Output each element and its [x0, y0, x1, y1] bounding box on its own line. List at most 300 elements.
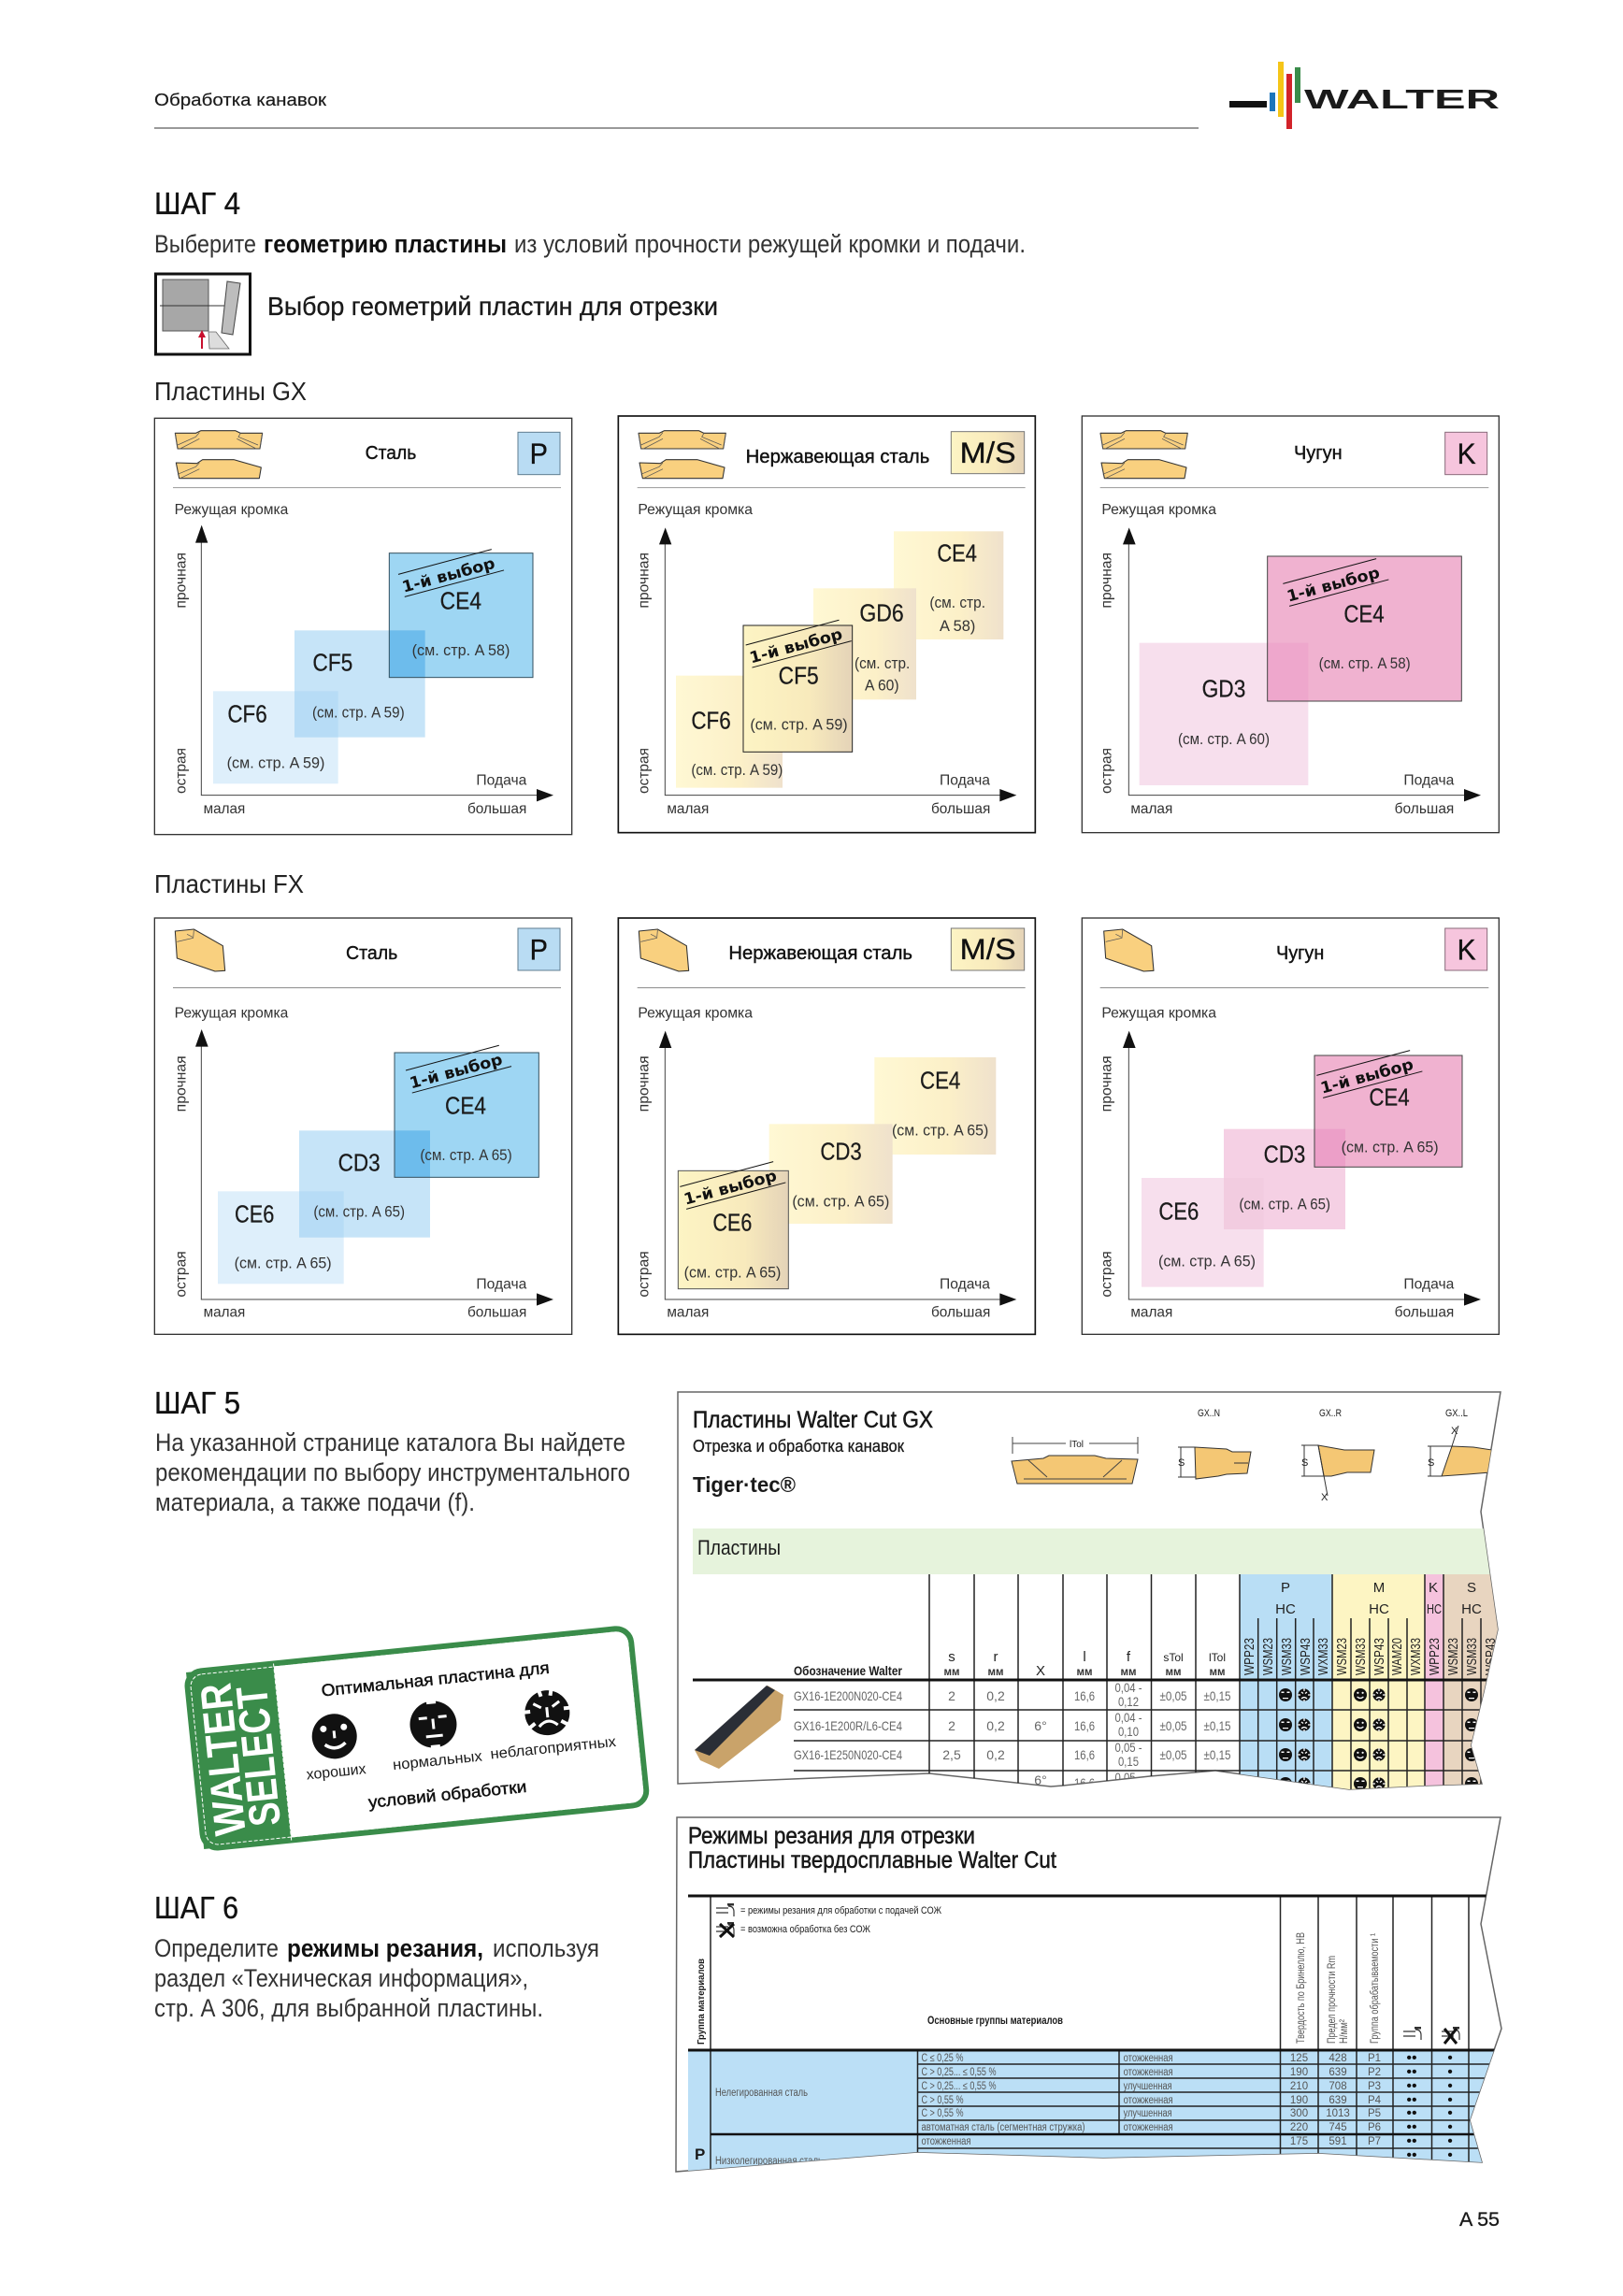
chart axes: Подача [1403, 1276, 1454, 1292]
badge: K [1445, 928, 1487, 970]
legend: coolant: = возможна обработка без СОЖ [740, 1924, 870, 1935]
table rows: material data: 745 [1329, 2122, 1347, 2133]
chart axes: острая [1099, 748, 1114, 794]
table header labels: Основные группы материалов [927, 2016, 1063, 2027]
legend: coolant: = режимы резания для обработки с подачей СОЖ [740, 1905, 941, 1916]
chart axes: прочная [636, 1055, 652, 1112]
box: CE4 [874, 1057, 996, 1155]
box: CE4 first choice [395, 1053, 539, 1177]
box: GD6: A 60) [865, 676, 899, 694]
chart axes: большая [931, 1305, 990, 1321]
box: CD3: (см. стр. A 65) [313, 1203, 405, 1221]
catalogue title [688, 1823, 1056, 1873]
chart axes: острая [1099, 1251, 1114, 1298]
text: step 6 instruction: Определите [154, 1934, 279, 1962]
table rows: material data: • [1447, 2064, 1453, 2080]
table header: columns: WPP23 [1242, 1638, 1257, 1675]
page number: A 55 [1459, 2209, 1500, 2231]
badge: Walter Select: нормальных [392, 1748, 483, 1773]
badge: M/S: M/S [960, 933, 1016, 966]
text: step 6 instruction: режимы резания, [287, 1934, 483, 1962]
box: GD6 [813, 588, 916, 699]
table rows: material data: • [1447, 2119, 1453, 2135]
chart axes: острая [173, 1251, 189, 1298]
table rows: material data: P6 [1368, 2122, 1381, 2133]
box: GD3: (см. стр. A 60) [1178, 730, 1270, 748]
box: CE6 [218, 1191, 344, 1284]
table rows: material data: 1013 [1326, 2108, 1350, 2119]
text: step 5 instruction: рекомендации по выбору инструментального [155, 1458, 630, 1486]
table header: columns: WSP43 [1483, 1638, 1499, 1675]
table rows: material data: •• [1406, 2092, 1417, 2108]
table rows: material data: 708 [1329, 2081, 1347, 2092]
box: CE4 first choice [389, 553, 533, 678]
table rows: material data: отожженная [922, 2136, 970, 2147]
table rows: material data: C > 0,55 % [922, 2095, 963, 2106]
table header: columns: WXM33 [1315, 1638, 1331, 1675]
table rows: material data: • [1447, 2105, 1453, 2121]
drawing: GX..N: GX..N [1198, 1408, 1220, 1419]
table header: columns: WSM33 [1279, 1638, 1295, 1675]
catalogue title: Пластины Walter Cut GX [693, 1407, 933, 1433]
text: step 6 instruction [154, 1934, 599, 2022]
table header: columns: WSM23 [1334, 1638, 1350, 1675]
box: CF5 first choice: (см. стр. A 59) [750, 716, 848, 734]
table rows: insert data: ±0,05 [1159, 1747, 1187, 1762]
chart axes: большая [931, 801, 990, 817]
chart axes: малая [1130, 801, 1172, 817]
table rows: material data: 428 [1329, 2053, 1347, 2064]
table header: columns: WPP23 [1427, 1638, 1443, 1675]
badge: Walter Select: SELECT [226, 1684, 290, 1829]
table rows: material data: автоматная сталь (сегментная стружка) [922, 2122, 1085, 2133]
box: CD3: CD3 [338, 1148, 381, 1176]
table rows: material data: 210 [1290, 2081, 1308, 2092]
logo: Walter [1229, 62, 1500, 129]
box: GD6: (см. стр. [855, 654, 910, 672]
box: CE4 first choice: CE4 [1343, 600, 1385, 628]
box: CD3 [769, 1124, 893, 1224]
box: CE4: CE4 [920, 1067, 960, 1095]
table rows: material data: Низколегированная сталь [715, 2156, 823, 2167]
chart axes [636, 1031, 1016, 1321]
box: CE6: CE6 [235, 1199, 274, 1227]
table rows: insert data: 2,5 [942, 1747, 961, 1762]
box: CF5: (см. стр. A 59) [312, 703, 405, 721]
band: inserts [693, 1528, 1492, 1574]
table header: columns: WSM23 [1260, 1638, 1276, 1675]
material title: Сталь [366, 443, 416, 464]
table rows: material data: • [1447, 2092, 1453, 2108]
table header: columns [794, 1580, 1499, 1679]
table rows: material data: • [1447, 2147, 1453, 2163]
chart axes: малая [1130, 1305, 1172, 1321]
table rows: material data: •• [1406, 2133, 1417, 2149]
drawing: GX..R: X [1321, 1492, 1329, 1503]
box: CD3 [1224, 1129, 1345, 1229]
heading: step 4: ШАГ 4 [154, 186, 240, 221]
box: CE4: CE4 [937, 539, 977, 567]
table rows: insert data: ±0,15 [1204, 1747, 1231, 1762]
icon: GX inserts [1100, 431, 1187, 479]
chart axes: большая [1395, 801, 1454, 817]
catalogue title: Режимы резания для отрезки [688, 1823, 975, 1849]
chart axes: прочная [1099, 1055, 1114, 1112]
icon: unfavourable conditions face [521, 1686, 574, 1738]
table rows: insert data: 0,12 [1118, 1694, 1139, 1709]
table rows: material data: 220 [1290, 2122, 1308, 2133]
drawing: GX..N: S [1178, 1457, 1185, 1469]
table rows: insert data: GX16-1E200N020-CE4 [794, 1688, 902, 1703]
catalogue title: Пластины твердосплавные Walter Cut [688, 1847, 1056, 1873]
table rows: material data: •• [1406, 2078, 1417, 2094]
table header labels: Предел прочности Rm [1325, 1956, 1338, 2044]
box: CE6: (см. стр. A 65) [1158, 1253, 1256, 1270]
icon: good conditions face [309, 1712, 359, 1761]
table rows: insert data: 2 [948, 1688, 955, 1703]
drawing: GX..L [1428, 1408, 1492, 1476]
table rows: material data: • [1447, 2078, 1453, 2094]
box: CF6 [213, 691, 338, 783]
table rows: insert data: 0,15 [1118, 1754, 1139, 1769]
table header: columns: sTol [1163, 1651, 1184, 1664]
table rows: insert data: 6° [1034, 1772, 1047, 1787]
table rows: material data: отожженная [1124, 2095, 1173, 2106]
badge: P: P [530, 934, 548, 967]
axis label: cutting edge: Режущая кромка [1101, 1005, 1216, 1021]
badge: K: K [1458, 934, 1476, 967]
chart axes: малая [667, 801, 709, 817]
badge: P [518, 432, 560, 475]
table rows: insert data: 0,2 [986, 1718, 1005, 1733]
table rows: material data: P5 [1368, 2108, 1381, 2119]
badge: Walter Select: хороших [306, 1761, 366, 1784]
table header labels: Н/мм² [1337, 2019, 1350, 2044]
chart axes: Подача [476, 772, 526, 788]
table rows: material data: • [1447, 2133, 1453, 2149]
text: step 4 instruction: Выберите [154, 230, 256, 258]
chart axes [636, 527, 1016, 817]
panel: GX stainless steel [618, 416, 1035, 833]
chart axes [173, 525, 553, 817]
drawing: GX insert with length dimension: lTol [1070, 1440, 1084, 1450]
drawing: GX..L: X [1451, 1426, 1458, 1437]
table rows: material data: отожженная [1124, 2067, 1173, 2078]
callout: first choice: 1-й выбор [400, 554, 497, 596]
table rows: material data: 300 [1290, 2108, 1308, 2119]
table rows: material data: P2 [1368, 2067, 1381, 2078]
table rows: material data: C > 0,25... ≤ 0,55 % [922, 2081, 997, 2092]
chart axes [1099, 527, 1481, 817]
drawing: GX..R [1301, 1408, 1374, 1503]
box: CF5 first choice [743, 625, 853, 752]
box: CE4 [894, 531, 1003, 639]
box: CE6: CE6 [1158, 1197, 1199, 1225]
material title: Нержавеющая сталь [746, 447, 929, 467]
chart axes: острая [636, 1251, 652, 1298]
box: CD3 [299, 1130, 430, 1238]
axis label: cutting edge: Режущая кромка [175, 1005, 288, 1021]
text: step 4 instruction [154, 230, 1026, 258]
table rows: material data: P3 [1368, 2081, 1381, 2092]
table header: columns: s [948, 1649, 955, 1665]
panel: GX steel [154, 418, 572, 835]
heading: GX inserts: Пластины GX [154, 377, 307, 406]
badge: Walter Select: условий обработки [367, 1777, 527, 1812]
drawing: GX..L: S [1428, 1457, 1434, 1469]
table rows: insert data: 0,05 - [1114, 1740, 1142, 1755]
table header labels [696, 1932, 1459, 2045]
chart axes: малая [667, 1305, 709, 1321]
table rows: insert data: 0,2 [986, 1688, 1005, 1703]
icon: parting-off tool [155, 274, 251, 354]
icon: GX inserts [639, 431, 725, 479]
chart axes: острая [636, 748, 652, 794]
table rows: material data: • [1447, 2050, 1453, 2066]
table rows: insert data: 0,2 [986, 1747, 1005, 1762]
icon: FX insert [1104, 929, 1154, 971]
text: step 5 instruction: материала, а также подачи (f). [155, 1488, 475, 1516]
chart axes: большая [467, 801, 526, 817]
table rows: insert data: 0,05 - [1114, 1770, 1142, 1785]
drawing: GX..R: GX..R [1319, 1408, 1342, 1419]
box: CE4: (см. стр. [929, 594, 985, 611]
table rows: material data: •• [1406, 2064, 1417, 2080]
table header: columns: мм [987, 1667, 1004, 1678]
table header: columns: WSP43 [1298, 1638, 1314, 1675]
badge: P: P [530, 438, 548, 470]
text: step 5 instruction [155, 1428, 630, 1516]
box: CE4 first choice: CE4 [1369, 1083, 1410, 1111]
box: CE4 first choice [1268, 556, 1461, 701]
badge: M/S [951, 928, 1025, 970]
chart axes: малая [204, 801, 245, 817]
table header: columns: мм [943, 1667, 960, 1678]
table rows: insert data: GX16-1E200R/L6-CE4 [794, 1718, 902, 1733]
table rows: insert data: 16,6 [1074, 1718, 1095, 1733]
panel: catalogue excerpt Walter Cut GX [678, 1392, 1515, 1799]
table rows: material data: 175 [1290, 2136, 1308, 2147]
table header: columns: WAM20 [1389, 1638, 1405, 1675]
heading: FX inserts: Пластины FX [154, 869, 304, 898]
axis label: cutting edge: Режущая кромка [638, 1005, 753, 1021]
box: CE4 first choice: CE4 [445, 1092, 486, 1120]
chart axes: Подача [940, 772, 990, 788]
table header: columns: HC [1427, 1601, 1442, 1617]
logo: Walter: WALTER [1304, 85, 1500, 115]
header section label: Обработка канавок [154, 90, 327, 109]
badge: K: K [1458, 438, 1476, 470]
callout: first choice: 1-й выбор [682, 1167, 779, 1209]
box: CE4 first choice: (см. стр. A 58) [412, 641, 510, 659]
box: CE4 first choice: (см. стр. A 65) [1342, 1138, 1439, 1155]
badge: P [518, 928, 560, 970]
table rows: material data: 591 [1329, 2136, 1347, 2147]
panel: FX stainless steel [618, 918, 1035, 1334]
table rows: insert data: 2 [948, 1718, 955, 1733]
subheading: geometry selection for parting: Выбор геометрий пластин для отрезки [267, 292, 718, 321]
axis label: cutting edge: Режущая кромка [1101, 502, 1216, 518]
box: CF6: CF6 [691, 706, 731, 734]
icon: normal conditions face [408, 1698, 459, 1751]
box: CF6: CF6 [227, 699, 267, 727]
table header: columns: WSP43 [1372, 1638, 1387, 1675]
callout: first choice: 1-й выбор [408, 1051, 505, 1092]
box: CE6 [1142, 1178, 1264, 1287]
heading: step 6: ШАГ 6 [154, 1890, 238, 1925]
table header: columns: f [1127, 1649, 1131, 1665]
chart axes: Подача [1403, 772, 1454, 788]
brand: Tiger-tec: Tiger·tec® [693, 1472, 796, 1497]
box: CD3: (см. стр. A 65) [792, 1193, 889, 1211]
box: CE4 first choice: CE4 [440, 587, 481, 615]
table header: columns: l [1083, 1649, 1086, 1665]
heading: step 5: ШАГ 5 [154, 1385, 240, 1420]
box: GD6: GD6 [859, 598, 904, 626]
table header: columns: HC [1369, 1601, 1389, 1617]
table rows: material data: •• [1406, 2147, 1417, 2163]
box: GD3 [1140, 643, 1308, 785]
band: inserts: Пластины [697, 1536, 781, 1559]
panel: FX cast iron [1082, 918, 1499, 1334]
table rows: material data: отожженная [1124, 2122, 1173, 2133]
table rows: material data: P1 [1368, 2053, 1381, 2064]
table header: columns: мм [1076, 1667, 1093, 1678]
table rows: material data: отожженная [1124, 2053, 1173, 2064]
panel: catalogue excerpt cutting data [676, 1817, 1511, 2178]
badge: M/S [951, 432, 1025, 474]
table rows: insert data: 0,04 - [1114, 1680, 1142, 1695]
table header: columns: Обозначение Walter [794, 1663, 902, 1678]
box: CD3: CD3 [820, 1138, 862, 1166]
chart axes: прочная [636, 552, 652, 609]
box: CD3: CD3 [1264, 1140, 1305, 1168]
callout: first choice: 1-й выбор [1285, 564, 1382, 606]
badge: Walter Select [186, 1628, 648, 1849]
table header labels: Группа материалов [696, 1959, 707, 2045]
table header: columns: X [1036, 1663, 1045, 1679]
box: CF5: CF5 [312, 648, 352, 676]
table rows: insert data: ±0,15 [1204, 1718, 1231, 1733]
table header labels: Группа обрабатываемости ¹ [1368, 1933, 1381, 2044]
badge: M/S: M/S [960, 437, 1016, 469]
chart axes [1099, 1031, 1481, 1321]
panel: GX cast iron [1082, 416, 1499, 833]
table rows: insert data: 0,10 [1118, 1724, 1139, 1739]
chart axes: большая [1395, 1305, 1454, 1321]
table rows: material data: 639 [1329, 2067, 1347, 2078]
drawing: GX..N [1178, 1408, 1251, 1479]
table header: columns: WXM33 [1408, 1638, 1424, 1675]
text: step 5 instruction: На указанной странице каталога Вы найдете [155, 1428, 625, 1457]
table rows: insert data: ±0,15 [1204, 1688, 1231, 1703]
text: step 4 instruction: геометрию пластины [264, 230, 507, 258]
table rows: material data: C > 0,25... ≤ 0,55 % [922, 2067, 997, 2078]
table rows: material data: •• [1406, 2119, 1417, 2135]
table rows: material data: 639 [1329, 2095, 1347, 2106]
table: suitability faces [1279, 1688, 1478, 1790]
catalogue subtitle: Отрезка и обработка канавок [693, 1437, 904, 1456]
table rows: material data: 190 [1290, 2067, 1308, 2078]
table header: columns: K [1429, 1580, 1438, 1596]
table rows: material data: 190 [1290, 2095, 1308, 2106]
box: CE6 first choice [678, 1170, 788, 1289]
table rows: material data: C > 0,55 % [922, 2108, 963, 2119]
table rows: material data: 125 [1290, 2053, 1308, 2064]
box: CD3: (см. стр. A 65) [1239, 1196, 1330, 1213]
badge: Walter Select: неблагоприятных [490, 1734, 617, 1763]
material title: Нержавеющая сталь [728, 943, 912, 964]
text: step 6 instruction: используя [493, 1934, 599, 1962]
legend: coolant [716, 1903, 941, 1937]
table: material rows background [688, 2050, 1511, 2176]
table header: columns: P [1281, 1580, 1290, 1596]
chart axes: прочная [173, 1055, 189, 1112]
callout: first choice: 1-й выбор [1318, 1055, 1415, 1098]
table rows: insert data: 16,6 [1074, 1747, 1095, 1762]
table rows: material data: Нелегированная сталь [715, 2088, 808, 2099]
table header: columns: r [993, 1649, 998, 1665]
material title: Чугун [1294, 443, 1343, 464]
text: step 6 instruction: раздел «Техническая информация», [154, 1964, 528, 1992]
table rows: material data: улучшенная [1124, 2108, 1172, 2119]
chart axes: малая [204, 1305, 245, 1321]
table rows: insert data: GX16-1E250N020-CE4 [794, 1747, 902, 1762]
text: step 4 instruction: из условий прочности режущей кромки и подачи. [514, 230, 1026, 258]
material title: Сталь [346, 943, 397, 964]
icon: GX inserts [175, 431, 263, 479]
table header: columns: HC [1275, 1601, 1296, 1617]
icon: FX insert [175, 929, 225, 971]
table rows: material data [695, 2050, 1453, 2167]
table header: columns: WSM23 [1445, 1638, 1461, 1675]
box: CF6: (см. стр. A 59) [691, 761, 783, 779]
box: CF5 first choice: CF5 [779, 662, 819, 690]
table rows: insert data [794, 1680, 1231, 1790]
chart axes: большая [467, 1305, 526, 1321]
box: CE6 first choice: (см. стр. A 65) [684, 1264, 781, 1282]
table: material colour columns [1240, 1574, 1509, 1799]
drawing: GX insert with length dimension [1012, 1437, 1138, 1484]
badge: Walter Select: WALTER [191, 1681, 255, 1838]
chart axes: Подача [940, 1276, 990, 1292]
box: CE4 first choice [1314, 1055, 1462, 1167]
table rows: insert data: 6° [1034, 1718, 1047, 1733]
table header: columns: M [1373, 1580, 1385, 1596]
box: CE6: (см. стр. A 65) [235, 1255, 332, 1272]
table header: columns: WSM33 [1353, 1638, 1369, 1675]
table rows: material data: P4 [1368, 2095, 1382, 2106]
table header labels: Твердость по Бринеллю, НВ [1294, 1932, 1307, 2044]
table header: columns: мм [1165, 1667, 1182, 1678]
drawing: GX..R: S [1301, 1457, 1308, 1469]
table header: columns: lTol [1209, 1651, 1226, 1664]
table header: columns: мм [1209, 1667, 1226, 1678]
callout: first choice: 1-й выбор [748, 625, 844, 667]
table rows: material data: •• [1406, 2105, 1417, 2121]
chart axes: прочная [173, 552, 189, 609]
table rows: insert data: 16,6 [1074, 1688, 1095, 1703]
panel: FX steel [154, 918, 572, 1334]
chart axes [173, 1029, 553, 1321]
table header: columns: HC [1461, 1601, 1482, 1617]
table rows: material data: C ≤ 0,25 % [922, 2053, 963, 2064]
text: step 6 instruction: стр. А 306, для выбранной пластины. [154, 1994, 543, 2022]
box: CF6: (см. стр. A 59) [227, 754, 324, 772]
chart axes: прочная [1099, 552, 1114, 609]
icon: FX insert [639, 929, 689, 971]
badge: K [1445, 432, 1487, 475]
